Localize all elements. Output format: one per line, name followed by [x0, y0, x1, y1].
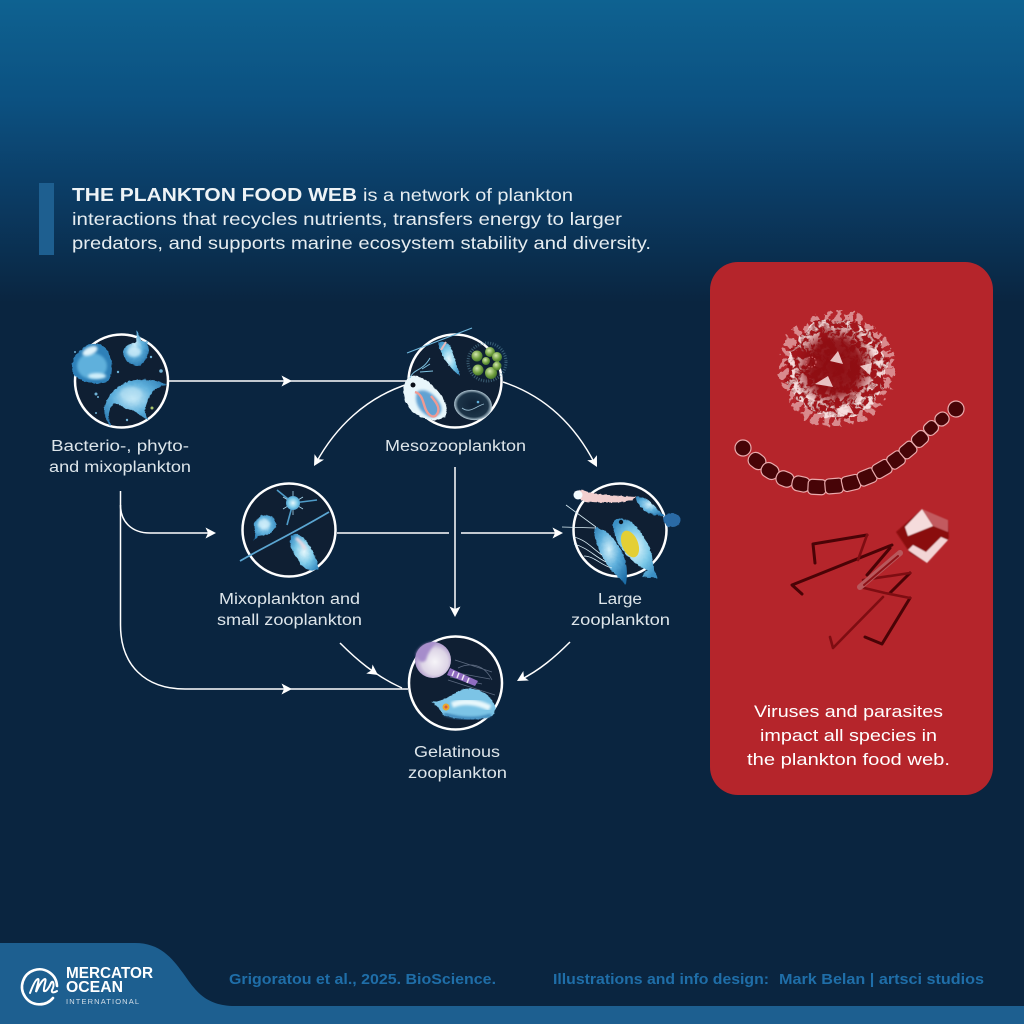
icon: small copepod [240, 512, 329, 570]
icon: heart-shaped plankton [72, 343, 112, 383]
food web arrows [120, 376, 602, 694]
icon: water flea [403, 358, 447, 420]
footer credits: Grigoratou et al., 2025. BioScience. [229, 971, 496, 988]
label: gelatinous zooplankton [408, 744, 507, 782]
icon: spiky virus [785, 317, 889, 421]
panel caption: Viruses and parasites [754, 703, 943, 721]
accent bar [39, 183, 54, 255]
icon: translucent jelly [452, 388, 494, 422]
footer credits: Mark Belan | artsci studios [779, 971, 984, 988]
footer credits [229, 971, 984, 988]
icon: jellyfish [415, 642, 495, 695]
label: bacterio-, phyto- and mixoplankton: Bacterio-, phyto- [51, 438, 189, 455]
icon: radiolarian [277, 490, 317, 525]
node: mixoplankton and small zooplankton [240, 484, 336, 576]
intro text block [39, 183, 651, 255]
intro copy: interactions that recycles nutrients, transfers energy to larger [72, 209, 622, 229]
logo: Mercator Ocean International [22, 965, 153, 1006]
label: large zooplankton: Large [598, 591, 642, 608]
intro heading: THE PLANKTON FOOD WEB [72, 184, 357, 205]
logo mark [22, 969, 57, 1004]
label: large zooplankton [571, 591, 670, 629]
icon: salp [432, 689, 495, 719]
node: large zooplankton [562, 484, 680, 584]
icon: krill [562, 505, 627, 584]
logo wordmark: OCEAN [66, 979, 123, 996]
logo wordmark: INTERNATIONAL [66, 997, 139, 1006]
panel caption: impact all species in [760, 727, 937, 745]
footer credits: Illustrations and info design: [553, 971, 769, 988]
node: mesozooplankton [403, 328, 506, 428]
icon: manta-shaped plankton [104, 380, 167, 426]
icon: yellow-bellied zooplankter [613, 519, 657, 578]
label: large zooplankton: zooplankton [571, 612, 670, 629]
icon: dinoflagellate [254, 515, 277, 541]
node: bacterio-, phyto- and mixoplankton [72, 330, 168, 428]
intro copy [72, 185, 651, 253]
label: gelatinous zooplankton: zooplankton [408, 765, 507, 782]
tiny cells [74, 341, 163, 421]
logo wordmark [66, 965, 153, 1006]
icon: copepod [407, 328, 472, 376]
footer band with logo tab [0, 943, 1024, 1024]
label: gelatinous zooplankton: Gelatinous [414, 744, 500, 761]
label: mixoplankton and small zooplankton [217, 591, 362, 629]
icon: arrow worm [574, 490, 680, 527]
panel: viruses and parasites [710, 262, 993, 795]
intro copy: predators, and supports marine ecosystem stability and diversity. [72, 233, 651, 253]
label: mixoplankton and small zooplankton: small zooplankton [217, 612, 362, 629]
icon: bacteriophage [792, 509, 949, 648]
node: gelatinous zooplankton [409, 636, 502, 730]
panel caption: the plankton food web. [747, 751, 950, 769]
label: mesozooplankton: Mesozooplankton [385, 438, 526, 455]
logo wordmark: MERCATOR [66, 965, 153, 982]
label: bacterio-, phyto- and mixoplankton [49, 438, 191, 476]
label: mixoplankton and small zooplankton: Mixoplankton and [219, 591, 360, 608]
panel caption [747, 703, 950, 769]
label: bacterio-, phyto- and mixoplankton: and mixoplankton [49, 459, 191, 476]
icon: chain bacteria [732, 398, 967, 495]
icon: dinoflagellate [123, 330, 149, 366]
icon: green algae colony [468, 343, 506, 381]
intro copy: is a network of plankton [363, 185, 573, 205]
